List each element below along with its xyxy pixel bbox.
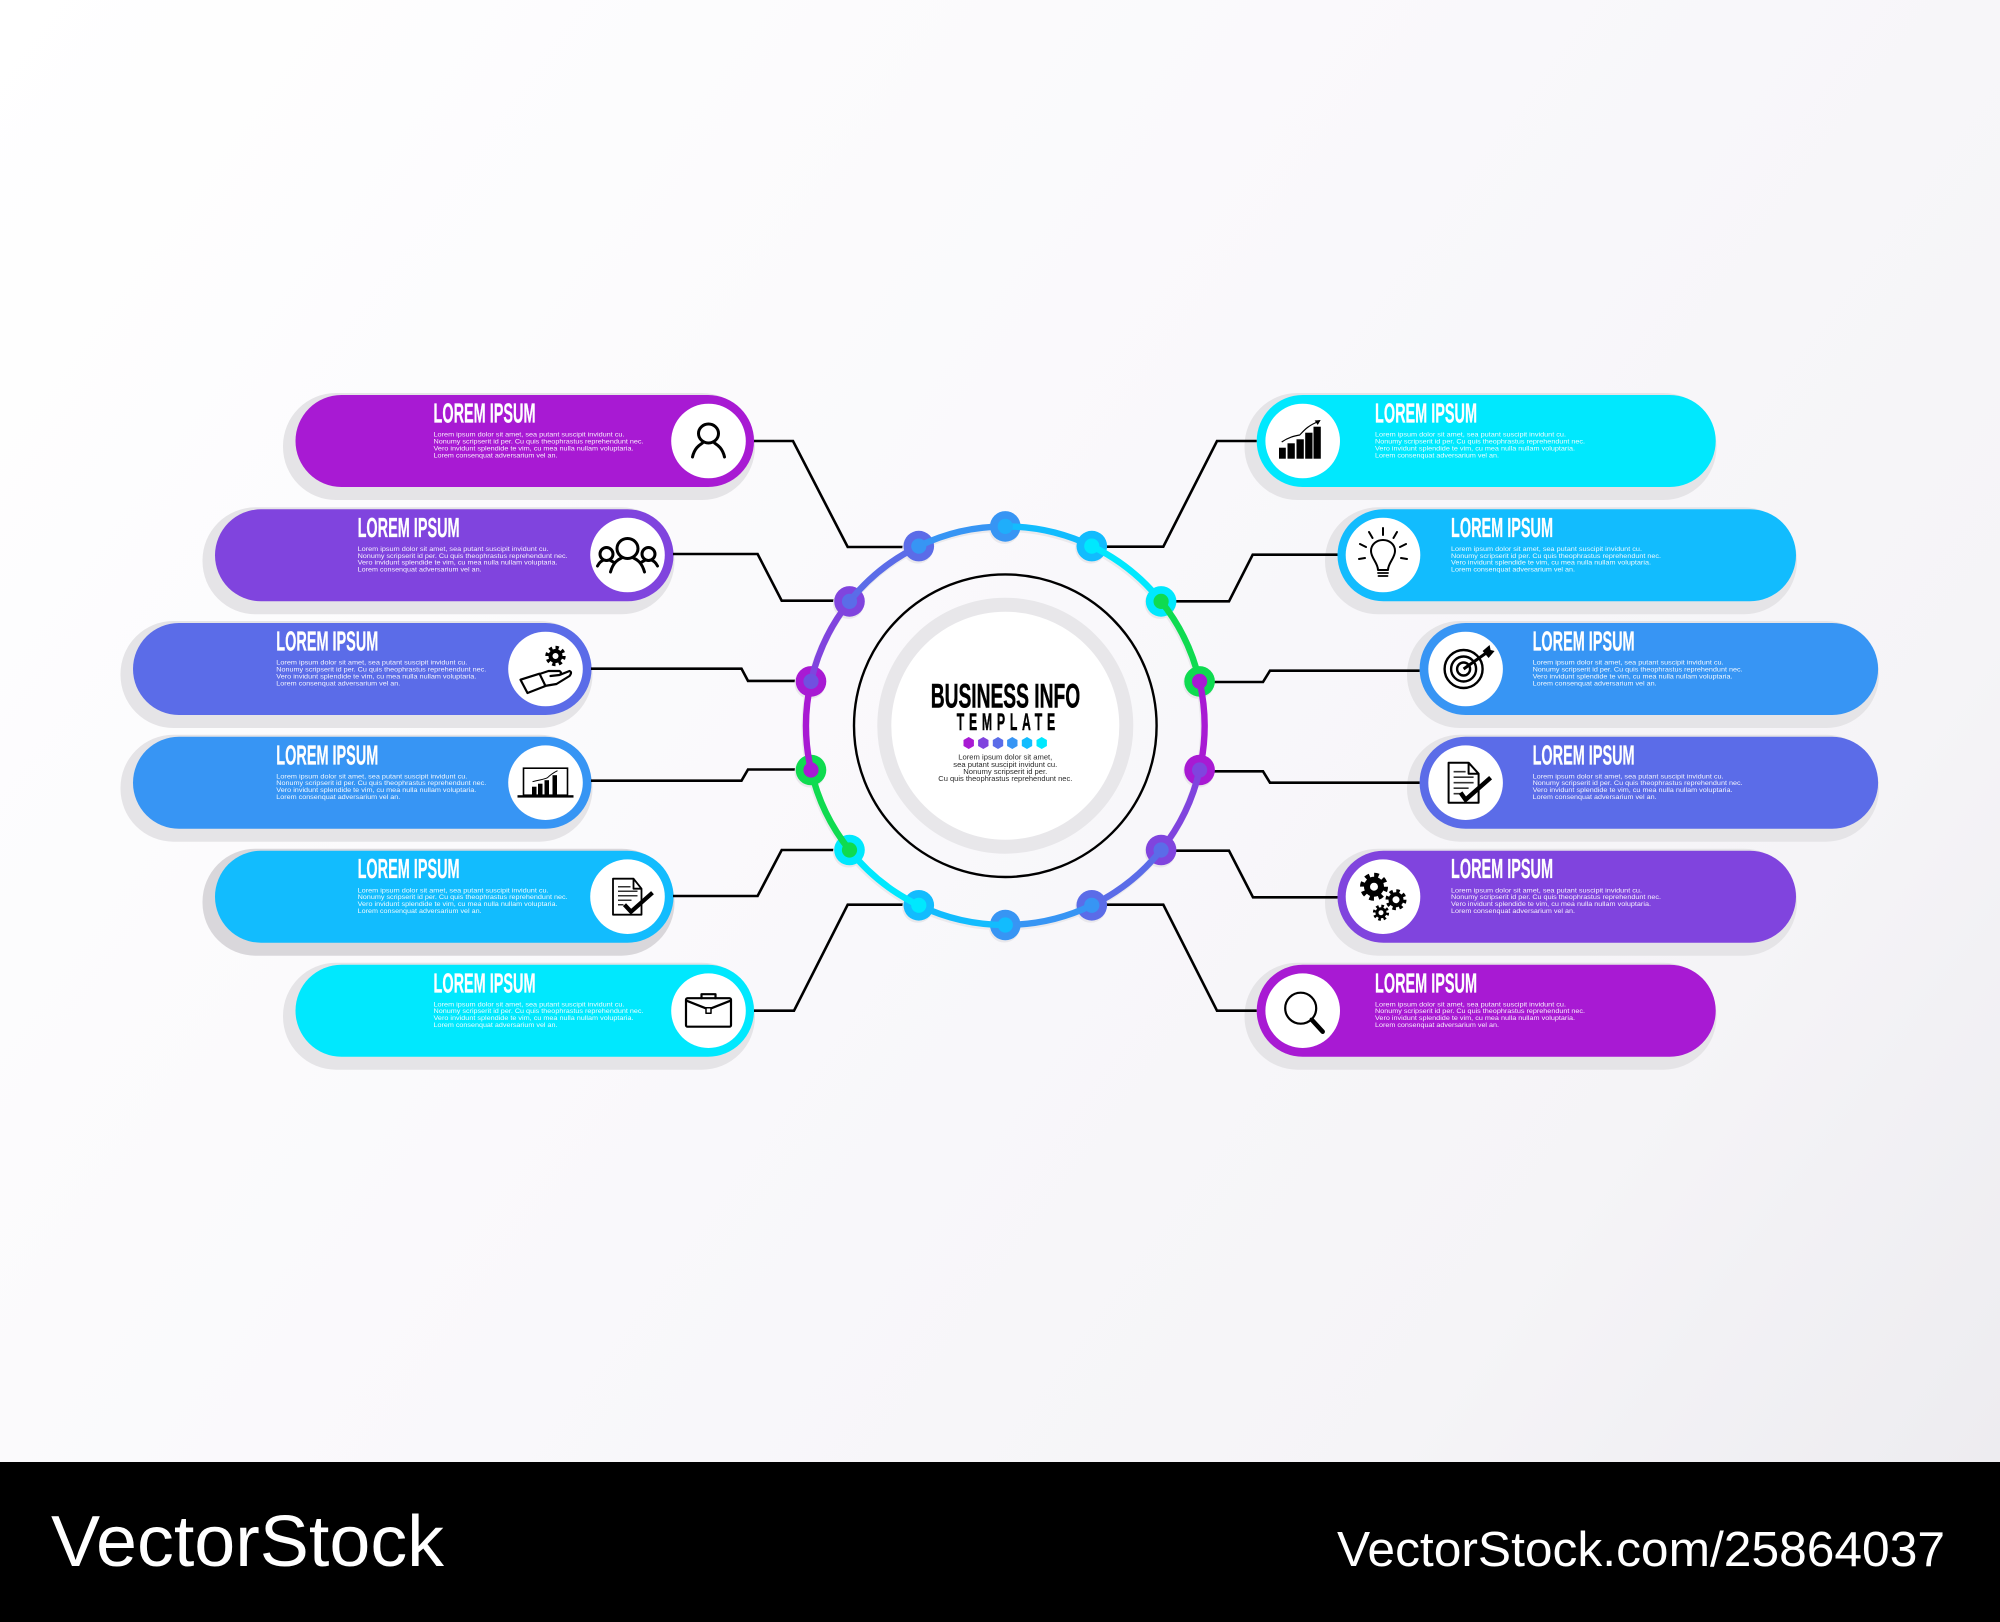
panel: left 5 xyxy=(202,849,674,956)
text block xyxy=(434,432,644,459)
text block: Vero invidunt splendide te vim, cu mea nulla nullam voluptaria. xyxy=(358,901,558,908)
text block: Lorem ipsum dolor sit amet, sea putant suscipit invidunt cu. xyxy=(276,660,467,667)
center description: Cu quis theophrastus reprehendunt nec. xyxy=(938,774,1072,783)
text block: Lorem ipsum dolor sit amet, sea putant suscipit invidunt cu. xyxy=(1375,432,1566,439)
footer logo text: VectorStock xyxy=(51,1502,445,1582)
panel: right 4 xyxy=(1407,735,1879,842)
heading: LOREM IPSUM xyxy=(358,853,460,884)
ring arc segments xyxy=(806,526,1205,925)
text block: Lorem consenquat adversarium vel an. xyxy=(1375,452,1499,459)
text block: Lorem consenquat adversarium vel an. xyxy=(276,794,400,801)
text block: Nonumy scripserit id per. Cu quis theophrastus reprehendunt nec. xyxy=(434,1008,644,1015)
icon: magnifying glass xyxy=(1285,993,1323,1032)
text block: Vero invidunt splendide te vim, cu mea nulla nullam voluptaria. xyxy=(1375,445,1575,452)
text block: Lorem ipsum dolor sit amet, sea putant suscipit invidunt cu. xyxy=(1375,1001,1566,1008)
heading: LOREM IPSUM xyxy=(1375,967,1477,998)
icon: gears xyxy=(1362,875,1404,919)
text block: Lorem consenquat adversarium vel an. xyxy=(1533,680,1657,687)
text block xyxy=(276,660,486,687)
panel: right 3 xyxy=(1407,621,1879,728)
text block: Lorem consenquat adversarium vel an. xyxy=(434,1022,558,1029)
text block: Lorem consenquat adversarium vel an. xyxy=(434,452,558,459)
text block xyxy=(1533,660,1743,687)
panel: left 1 xyxy=(283,393,755,500)
text block: Nonumy scripserit id per. Cu quis theophrastus reprehendunt nec. xyxy=(1451,553,1661,560)
text block: Nonumy scripserit id per. Cu quis theophrastus reprehendunt nec. xyxy=(358,553,568,560)
text block: Lorem ipsum dolor sit amet, sea putant suscipit invidunt cu. xyxy=(434,1001,625,1008)
heading: LOREM IPSUM xyxy=(276,626,378,657)
text block xyxy=(1533,773,1743,801)
text block: Vero invidunt splendide te vim, cu mea nulla nullam voluptaria. xyxy=(276,787,476,794)
icon: group of people xyxy=(598,538,658,572)
text block: Nonumy scripserit id per. Cu quis theophrastus reprehendunt nec. xyxy=(1375,1008,1585,1015)
text block: Lorem ipsum dolor sit amet, sea putant suscipit invidunt cu. xyxy=(1451,887,1642,894)
text block: Lorem consenquat adversarium vel an. xyxy=(358,567,482,574)
text block: Vero invidunt splendide te vim, cu mea nulla nullam voluptaria. xyxy=(276,673,476,680)
panel: left 4 xyxy=(120,735,592,842)
heading: LOREM IPSUM xyxy=(276,739,378,770)
panel: left 6 xyxy=(283,963,755,1070)
icon: document with check xyxy=(1449,763,1491,803)
icon: rising bar chart xyxy=(1279,420,1321,459)
ring node inner dots xyxy=(803,519,1207,933)
black outline circle xyxy=(854,574,1157,877)
panel: right 1 xyxy=(1244,393,1716,500)
icon: laptop with chart xyxy=(518,768,574,798)
center description: sea putant suscipit invidunt cu. xyxy=(953,760,1057,769)
panel: right 5 xyxy=(1325,849,1797,956)
text block: Nonumy scripserit id per. Cu quis theophrastus reprehendunt nec. xyxy=(1375,438,1585,446)
text block: Nonumy scripserit id per. Cu quis theophrastus reprehendunt nec. xyxy=(434,438,644,446)
text block: Lorem ipsum dolor sit amet, sea putant suscipit invidunt cu. xyxy=(434,432,625,439)
text block: Vero invidunt splendide te vim, cu mea nulla nullam voluptaria. xyxy=(434,1015,634,1022)
text block xyxy=(358,887,568,915)
center description: Lorem ipsum dolor sit amet, xyxy=(958,753,1052,762)
text block: Vero invidunt splendide te vim, cu mea nulla nullam voluptaria. xyxy=(1375,1015,1575,1022)
center heading: BUSINESS INFO xyxy=(931,677,1080,715)
text block: Lorem consenquat adversarium vel an. xyxy=(276,680,400,687)
text block xyxy=(276,773,486,801)
footer url text: VectorStock.com/25864037 xyxy=(1337,1522,1945,1577)
grey ring xyxy=(884,605,1126,847)
connector lines xyxy=(591,441,1420,1011)
text block xyxy=(434,1001,644,1029)
panel: right 2 xyxy=(1325,507,1797,614)
text block: Vero invidunt splendide te vim, cu mea nulla nullam voluptaria. xyxy=(434,445,634,452)
text block: Vero invidunt splendide te vim, cu mea nulla nullam voluptaria. xyxy=(1533,787,1733,794)
icon: hand with gear xyxy=(520,648,571,693)
heading: LOREM IPSUM xyxy=(1451,512,1553,543)
center subheading: TEMPLATE xyxy=(957,708,1055,736)
panel: left 2 xyxy=(202,507,674,614)
center description xyxy=(938,753,1072,783)
heading: LOREM IPSUM xyxy=(1375,398,1477,429)
heading: LOREM IPSUM xyxy=(434,398,536,429)
text block: Lorem ipsum dolor sit amet, sea putant suscipit invidunt cu. xyxy=(1533,773,1724,780)
text block: Lorem ipsum dolor sit amet, sea putant suscipit invidunt cu. xyxy=(1533,660,1724,667)
text block: Vero invidunt splendide te vim, cu mea nulla nullam voluptaria. xyxy=(1451,560,1651,567)
icon: document with check xyxy=(613,879,652,915)
text block: Lorem consenquat adversarium vel an. xyxy=(1375,1022,1499,1029)
text block: Lorem consenquat adversarium vel an. xyxy=(1533,794,1657,801)
text block: Lorem ipsum dolor sit amet, sea putant suscipit invidunt cu. xyxy=(1451,546,1642,553)
text block: Nonumy scripserit id per. Cu quis theophrastus reprehendunt nec. xyxy=(358,894,568,901)
icon: person xyxy=(692,424,724,457)
text block: Nonumy scripserit id per. Cu quis theophrastus reprehendunt nec. xyxy=(1533,780,1743,787)
heading: LOREM IPSUM xyxy=(1533,739,1635,770)
text block: Lorem ipsum dolor sit amet, sea putant suscipit invidunt cu. xyxy=(276,773,467,780)
text block: Vero invidunt splendide te vim, cu mea nulla nullam voluptaria. xyxy=(358,560,558,567)
text block: Nonumy scripserit id per. Cu quis theophrastus reprehendunt nec. xyxy=(1451,894,1661,901)
panel: left 3 xyxy=(120,621,592,728)
icon: briefcase xyxy=(686,994,731,1027)
text block: Nonumy scripserit id per. Cu quis theophrastus reprehendunt nec. xyxy=(276,780,486,787)
heading: LOREM IPSUM xyxy=(1533,626,1635,657)
text block: Nonumy scripserit id per. Cu quis theophrastus reprehendunt nec. xyxy=(1533,666,1743,674)
center description: Nonumy scripserit id per. xyxy=(963,767,1047,776)
text block: Vero invidunt splendide te vim, cu mea nulla nullam voluptaria. xyxy=(1533,673,1733,680)
heading: LOREM IPSUM xyxy=(1451,853,1553,884)
text block xyxy=(1451,546,1661,574)
panel: right 6 xyxy=(1244,963,1716,1070)
text block xyxy=(358,546,568,574)
heading: LOREM IPSUM xyxy=(434,967,536,998)
hexagon dots xyxy=(964,737,1047,749)
text block: Lorem consenquat adversarium vel an. xyxy=(1451,908,1575,915)
ring node outer circles xyxy=(794,511,1215,942)
text block: Lorem consenquat adversarium vel an. xyxy=(358,908,482,915)
text block: Vero invidunt splendide te vim, cu mea nulla nullam voluptaria. xyxy=(1451,901,1651,908)
text block: Lorem consenquat adversarium vel an. xyxy=(1451,567,1575,574)
text block: Nonumy scripserit id per. Cu quis theophrastus reprehendunt nec. xyxy=(276,666,486,674)
text block: Lorem ipsum dolor sit amet, sea putant suscipit invidunt cu. xyxy=(358,887,549,894)
central diagram xyxy=(794,511,1215,942)
text block xyxy=(1375,1001,1585,1029)
text block xyxy=(1375,432,1585,459)
icon: target with arrow xyxy=(1445,645,1495,688)
ring shadow xyxy=(805,528,1204,927)
text block: Lorem ipsum dolor sit amet, sea putant suscipit invidunt cu. xyxy=(358,546,549,553)
heading: LOREM IPSUM xyxy=(358,512,460,543)
icon: light bulb xyxy=(1359,528,1407,576)
text block xyxy=(1451,887,1661,915)
footer bar xyxy=(0,1462,2000,1622)
